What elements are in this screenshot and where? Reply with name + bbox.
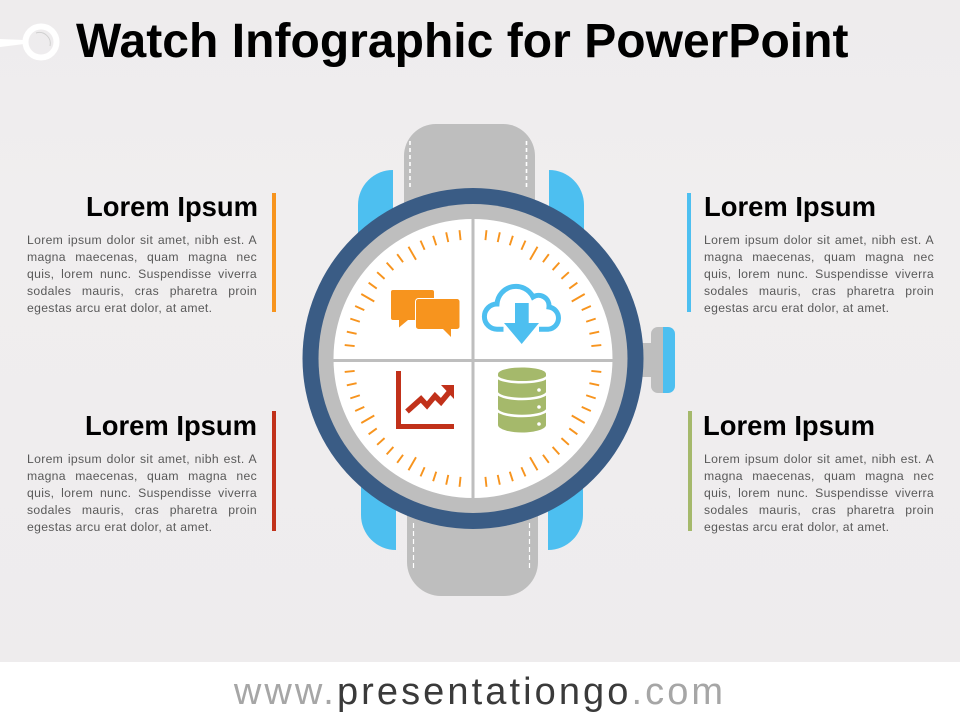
crown bbox=[640, 327, 675, 393]
text block: quis, lorem nunc. Suspendisse viverra bbox=[27, 267, 257, 281]
text block: magna maecenas, quam magna nec bbox=[704, 469, 934, 483]
heading: Lorem Ipsum bbox=[703, 410, 875, 441]
accent bar green bbox=[688, 411, 692, 531]
text block: Lorem ipsum dolor sit amet, nibh est. A bbox=[27, 452, 257, 466]
panel: bottom right bbox=[688, 410, 934, 534]
lugs: blue bbox=[358, 170, 584, 550]
accent bar blue bbox=[687, 193, 691, 312]
footer band bbox=[0, 662, 960, 720]
title: Watch Infographic for PowerPoint bbox=[76, 15, 849, 68]
text block: egestas arcu erat dolor, at amet. bbox=[704, 520, 889, 534]
text block bbox=[27, 233, 257, 315]
panel: bottom left bbox=[27, 410, 276, 534]
text block: Lorem ipsum dolor sit amet, nibh est. A bbox=[704, 452, 934, 466]
text block bbox=[704, 233, 934, 315]
text block: magna maecenas, quam magna nec bbox=[704, 250, 934, 264]
text block: Lorem ipsum dolor sit amet, nibh est. A bbox=[704, 233, 934, 247]
heading: Lorem Ipsum bbox=[704, 191, 876, 222]
text block: Lorem ipsum dolor sit amet, nibh est. A bbox=[27, 233, 257, 247]
heading: Lorem Ipsum bbox=[85, 410, 257, 441]
panel: top right bbox=[687, 191, 934, 315]
icon: cloud download bbox=[484, 286, 558, 344]
icon: chat bubbles bbox=[391, 290, 460, 337]
text block: sodales mauris, cras pharetra proin bbox=[704, 503, 934, 517]
watch illustration bbox=[302, 124, 675, 596]
accent bar red bbox=[272, 411, 276, 531]
text block bbox=[704, 452, 934, 534]
strap: top bbox=[404, 124, 535, 260]
text block: egestas arcu erat dolor, at amet. bbox=[704, 301, 889, 315]
footer url: www.presentationgo.com bbox=[234, 671, 726, 713]
dial ticks bbox=[345, 230, 601, 487]
text block bbox=[27, 452, 257, 534]
watch case bbox=[302, 188, 644, 529]
text block: sodales mauris, cras pharetra proin bbox=[27, 503, 257, 517]
text block: sodales mauris, cras pharetra proin bbox=[704, 284, 934, 298]
accent bar orange bbox=[272, 193, 276, 312]
text block: sodales mauris, cras pharetra proin bbox=[27, 284, 257, 298]
text block: quis, lorem nunc. Suspendisse viverra bbox=[704, 267, 934, 281]
icon: database bbox=[497, 368, 547, 432]
text block: egestas arcu erat dolor, at amet. bbox=[27, 301, 212, 315]
text block: magna maecenas, quam magna nec bbox=[27, 469, 257, 483]
panel: top left bbox=[27, 191, 276, 315]
icon: line chart bbox=[396, 371, 454, 429]
text block: quis, lorem nunc. Suspendisse viverra bbox=[704, 486, 934, 500]
heading: Lorem Ipsum bbox=[86, 191, 258, 222]
text block: quis, lorem nunc. Suspendisse viverra bbox=[27, 486, 257, 500]
strap: bottom bbox=[407, 460, 538, 596]
text block: egestas arcu erat dolor, at amet. bbox=[27, 520, 212, 534]
logo: magnifier ring bbox=[0, 24, 60, 60]
text block: magna maecenas, quam magna nec bbox=[27, 250, 257, 264]
